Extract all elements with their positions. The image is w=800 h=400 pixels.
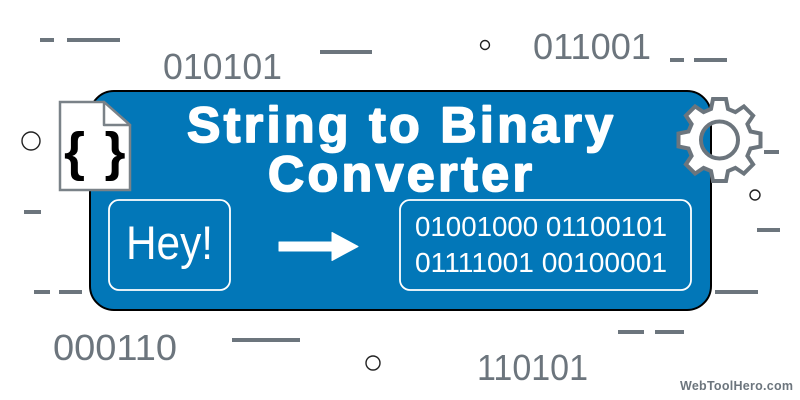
input box: Hey! xyxy=(109,200,230,290)
panel: converter xyxy=(90,91,711,310)
heading: line 1: String to Binary xyxy=(187,97,613,153)
watermark: WebToolHero.com xyxy=(680,379,793,393)
output box: binary text: 01111001 00100001 xyxy=(415,247,667,278)
icon: code file xyxy=(60,102,130,190)
arrow xyxy=(279,232,358,260)
binary number: 000110: 000110 xyxy=(53,327,177,368)
input box: Hey!: Hey! xyxy=(126,216,213,269)
binary number: 010101: 010101 xyxy=(163,46,282,87)
icon: code file: } xyxy=(104,122,126,182)
icon: gear xyxy=(678,99,760,181)
binary number: 110101: 110101 xyxy=(477,347,588,388)
heading: line 2: Converter xyxy=(268,146,532,202)
output box: binary text xyxy=(400,200,691,290)
icon: code file: { xyxy=(64,122,85,182)
output box: binary text: 01001000 01100101 xyxy=(415,211,667,242)
binary number: 011001: 011001 xyxy=(533,26,651,67)
